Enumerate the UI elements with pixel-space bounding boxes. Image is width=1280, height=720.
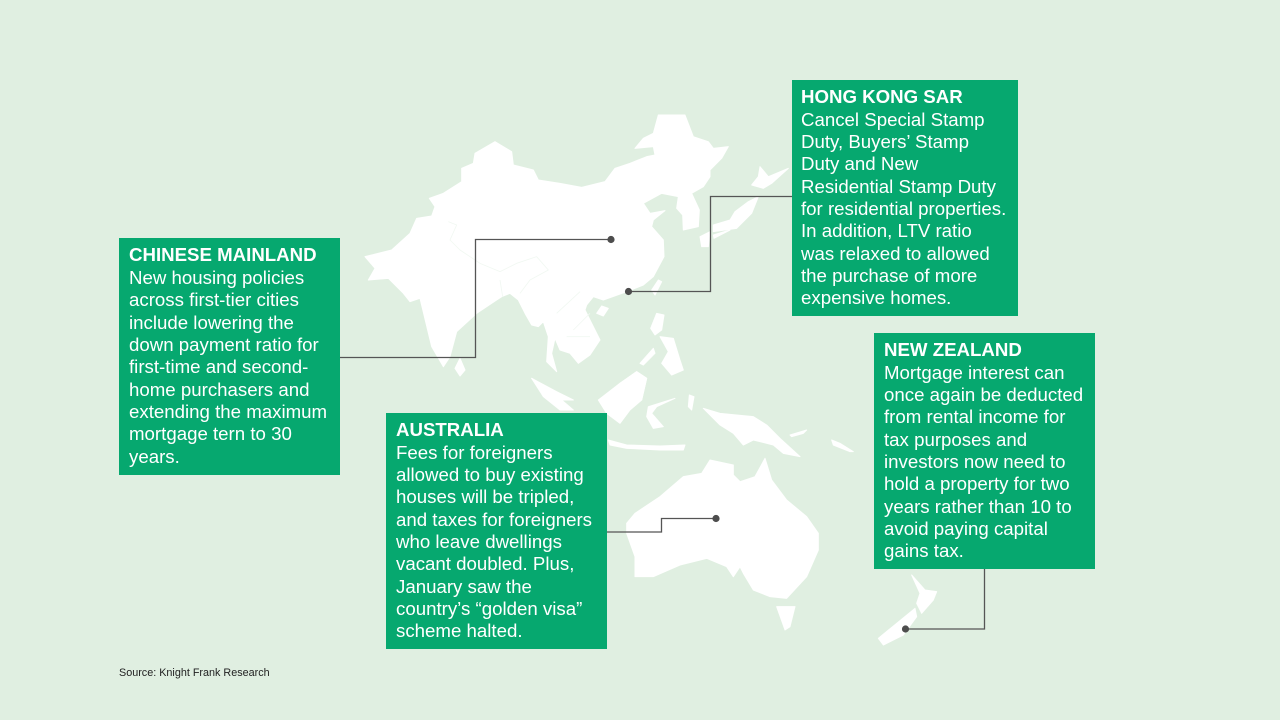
connector: Chinese Mainland — [340, 236, 615, 358]
connector: Hong Kong SAR — [625, 196, 792, 295]
faint borders — [448, 222, 590, 337]
panel: Hong Kong SAR: HONG KONG SAR — [801, 86, 963, 107]
panel: Hong Kong SAR: In addition, LTV ratio — [801, 220, 972, 241]
panel: Australia: Fees for foreigners — [396, 442, 553, 463]
panel: New Zealand: once again be deducted — [884, 384, 1083, 405]
panel: Australia: January saw the — [396, 576, 532, 597]
panel: New Zealand: avoid paying capital — [884, 518, 1048, 539]
map: mainland Asia — [365, 115, 788, 400]
panel: Hong Kong SAR: expensive homes. — [801, 287, 951, 308]
connector: Australia — [607, 515, 720, 532]
panel: Australia: country’s “golden visa” — [396, 598, 582, 619]
panel: Hong Kong SAR: was relaxed to allowed — [801, 243, 990, 264]
panel: Australia: allowed to buy existing — [396, 464, 584, 485]
panel: Hong Kong SAR: Duty, Buyers’ Stamp — [801, 131, 969, 152]
panel: Hong Kong SAR: Residential Stamp Duty — [801, 176, 996, 197]
panel: New Zealand: gains tax. — [884, 540, 964, 561]
panel: Australia: scheme halted. — [396, 620, 523, 641]
panel: Hong Kong SAR: the purchase of more — [801, 265, 977, 286]
panel: Chinese Mainland — [119, 238, 340, 475]
panel: Australia: houses will be tripled, — [396, 486, 574, 507]
panel: Australia — [386, 413, 607, 649]
panel: Chinese Mainland: years. — [129, 446, 180, 467]
panel: Hong Kong SAR: Cancel Special Stamp — [801, 109, 985, 130]
panel: New Zealand: from rental income for — [884, 406, 1065, 427]
panel: Chinese Mainland: New housing policies — [129, 267, 304, 288]
source note: Source: Knight Frank Research — [119, 667, 270, 679]
panel: Hong Kong SAR — [792, 80, 1018, 316]
panel: Chinese Mainland: CHINESE MAINLAND — [129, 244, 317, 265]
panel: Chinese Mainland: include lowering the — [129, 312, 294, 333]
panel: New Zealand: tax purposes and — [884, 429, 1027, 450]
panel: Chinese Mainland: extending the maximum — [129, 401, 327, 422]
panel: Chinese Mainland: first-time and second- — [129, 356, 308, 377]
panel: Hong Kong SAR: for residential properties. — [801, 198, 1006, 219]
panel: Australia: AUSTRALIA — [396, 419, 504, 440]
panel: Australia: vacant doubled. Plus, — [396, 553, 574, 574]
panel: New Zealand — [874, 333, 1095, 569]
panel: New Zealand: NEW ZEALAND — [884, 339, 1022, 360]
panel: Chinese Mainland: mortgage tern to 30 — [129, 423, 292, 444]
connector: New Zealand — [902, 569, 984, 633]
panel: New Zealand: Mortgage interest can — [884, 362, 1064, 383]
panel: Chinese Mainland: down payment ratio for — [129, 334, 319, 355]
panel: New Zealand: investors now need to — [884, 451, 1066, 472]
panel: Chinese Mainland: across first-tier cities — [129, 289, 299, 310]
map: Australia and Oceania — [532, 372, 937, 645]
panel: New Zealand: hold a property for two — [884, 473, 1070, 494]
panel: Chinese Mainland: home purchasers and — [129, 379, 309, 400]
panel: Australia: and taxes for foreigners — [396, 509, 592, 530]
panel: Hong Kong SAR: Duty and New — [801, 153, 918, 174]
panel: New Zealand: years rather than 10 to — [884, 496, 1072, 517]
panel: Australia: who leave dwellings — [396, 531, 562, 552]
